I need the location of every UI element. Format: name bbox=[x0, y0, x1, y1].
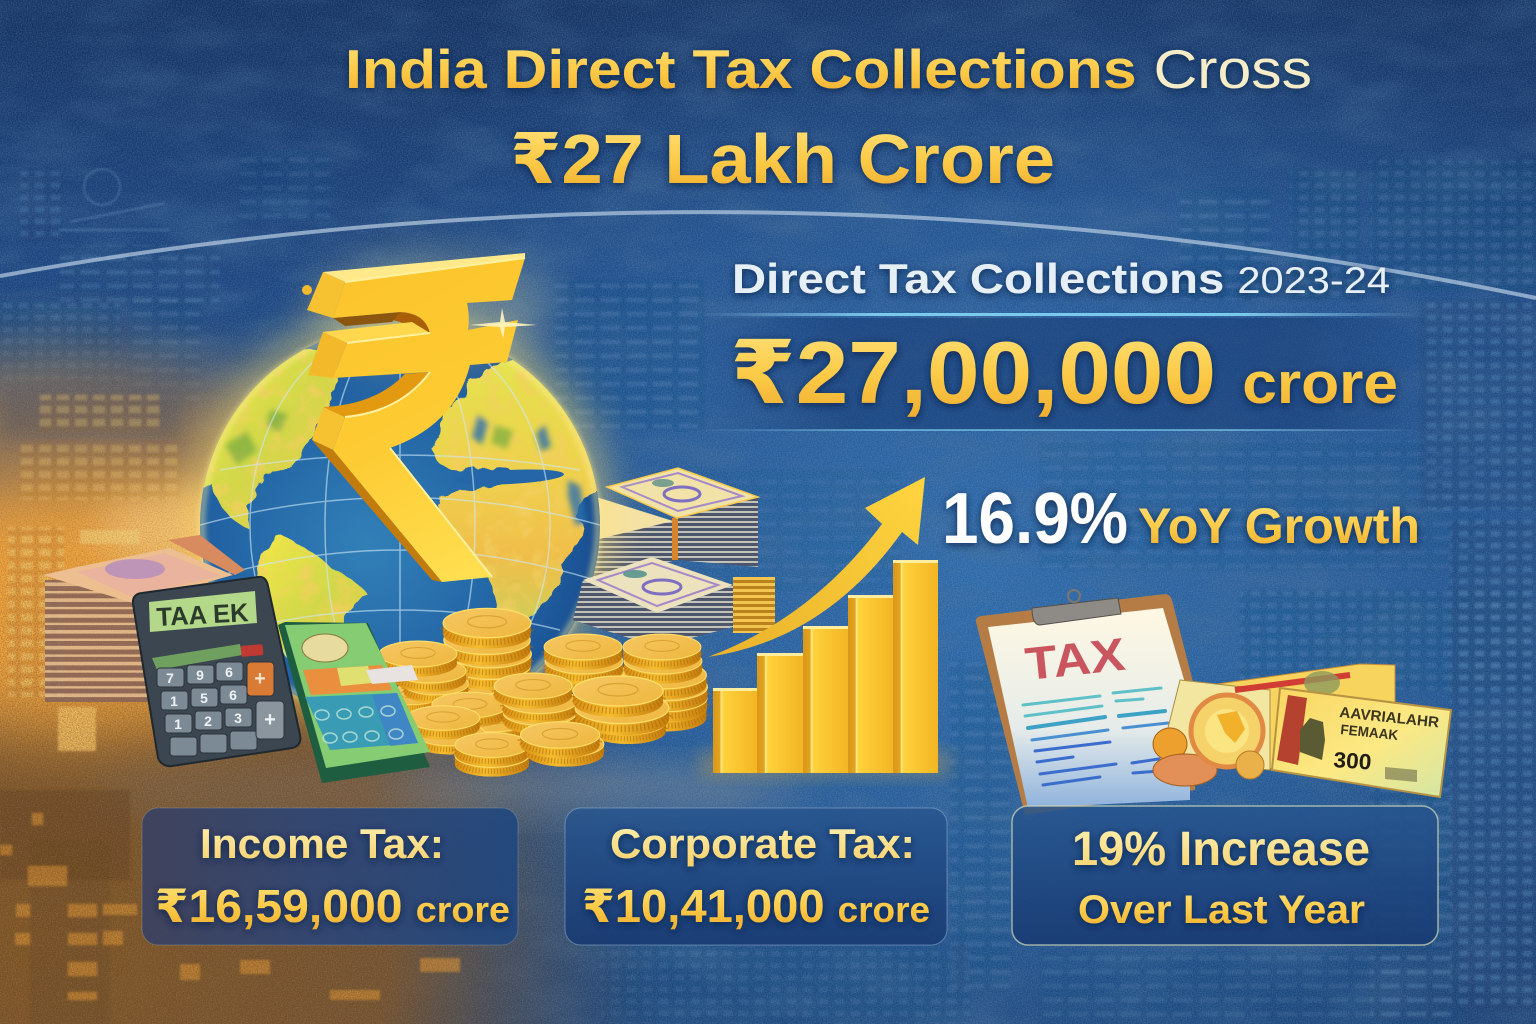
bar chart: growth bars with arrow bbox=[700, 477, 950, 778]
ticket note: AAVRIALAHR bbox=[1339, 704, 1440, 731]
calculator keys: 1 bbox=[170, 693, 178, 709]
icon: front banknote stack bbox=[573, 557, 775, 647]
over last year label: Over Last Year bbox=[1078, 888, 1365, 932]
lit city windows bbox=[0, 385, 460, 1024]
icon: rupee symbol bbox=[302, 250, 550, 582]
growth stat bbox=[942, 479, 1420, 559]
calculator keys: 2 bbox=[204, 713, 212, 729]
document lines bbox=[1023, 688, 1168, 785]
subtitle: Direct Tax Collections 2023-24 bbox=[732, 255, 1390, 302]
corporate tax label: Corporate Tax: bbox=[610, 820, 915, 867]
title line 2: ₹27 Lakh Crore bbox=[510, 120, 1055, 198]
icon: calculator bbox=[133, 577, 300, 766]
ticket note bbox=[1272, 688, 1451, 797]
calculator keys: + bbox=[264, 709, 276, 731]
calculator keys: 3 bbox=[234, 710, 242, 726]
corporate tax amount: ₹10,41,000 crore bbox=[582, 880, 930, 932]
icon: banknotes and medallion bbox=[1153, 664, 1451, 797]
growth arrow bbox=[708, 477, 925, 657]
calculator keys bbox=[157, 662, 284, 756]
rupee extrusion sides bbox=[307, 253, 525, 582]
calculator keys: 1 bbox=[174, 716, 182, 732]
growth stat: YoY Growth bbox=[1138, 498, 1420, 554]
icon: tax clipboard bbox=[976, 590, 1195, 815]
coin stack middle bbox=[544, 634, 625, 693]
coin stack left bbox=[379, 641, 468, 712]
coin stack right bbox=[623, 634, 707, 732]
ticket note: FEMAAK bbox=[1340, 721, 1399, 743]
icon: gold coins bbox=[379, 608, 707, 777]
income tax amount: ₹16,59,000 crore bbox=[155, 880, 510, 932]
TAX label: TAX bbox=[1023, 628, 1128, 690]
growth stat: 16.9% bbox=[942, 479, 1128, 559]
panel: corporate tax bbox=[565, 808, 947, 945]
panel: income tax bbox=[142, 808, 518, 945]
bars bbox=[713, 560, 938, 773]
clip bbox=[1032, 598, 1121, 625]
calculator keys: 6 bbox=[225, 664, 233, 680]
header arc line bbox=[0, 212, 1536, 298]
coin stack center bbox=[494, 673, 577, 734]
coin stack back bbox=[439, 608, 531, 704]
coin stack bottom bbox=[455, 722, 604, 777]
calculator keys: 6 bbox=[229, 687, 237, 703]
ticket note: 300 bbox=[1333, 747, 1372, 775]
coin stack center left bbox=[432, 692, 529, 741]
coin stack right front bbox=[573, 676, 669, 744]
icon: back banknote stacks bbox=[590, 468, 758, 580]
panel: headline total bbox=[690, 255, 1450, 431]
coin stack left front bbox=[406, 706, 485, 755]
income tax label: Income Tax: bbox=[200, 820, 444, 867]
panel: yearly increase bbox=[1012, 806, 1438, 945]
title line 1: India Direct Tax Collections Cross bbox=[345, 38, 1312, 100]
total amount: ₹27,00,000 crore bbox=[730, 323, 1398, 422]
calculator keys: 5 bbox=[200, 690, 208, 706]
icon: globe bbox=[188, 308, 612, 732]
title bbox=[345, 38, 1312, 198]
bar top highlights bbox=[713, 560, 938, 691]
calculator keys: 9 bbox=[196, 667, 204, 683]
calculator keys: + bbox=[254, 668, 266, 690]
icon: green tax booklet bbox=[278, 622, 430, 783]
calculator keys: 7 bbox=[166, 670, 174, 686]
calculator display: TAA EK bbox=[156, 597, 249, 632]
increase label: 19% Increase bbox=[1072, 823, 1370, 876]
icon: left banknote stack bbox=[43, 535, 245, 702]
